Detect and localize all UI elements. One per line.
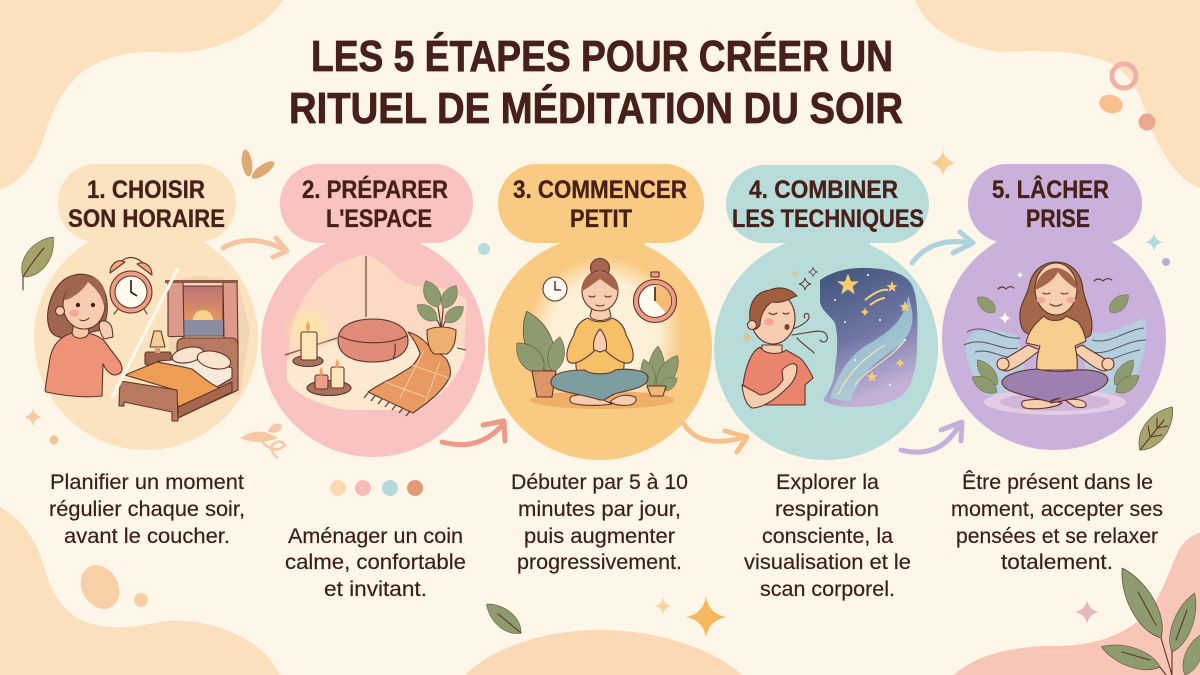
ground shadow [530,391,674,409]
step 1 heading: 1. CHOISIR [87,176,205,204]
icon: ground mat [984,389,1126,415]
step 2 badge shape [261,164,485,457]
step 4 description: respiration [775,498,879,521]
icon: birds and stars [998,272,1112,324]
icon: pot plant [413,277,468,354]
illustration: woman thinking [45,274,122,397]
step 3 description: progressivement. [517,551,682,574]
panel: step 2 [261,164,485,457]
icon: sparkles bottom center [654,597,726,637]
icon: wall clock [543,277,567,301]
step 3 description [511,471,688,574]
arrow: step 5 lead-in [901,422,962,452]
icon: alarm clock [110,258,152,314]
illustration: meditating woman [997,262,1114,409]
icon: left plant [509,306,568,397]
step 5 badge shape [942,164,1166,450]
title: RITUEL DE MÉDITATION DU SOIR [289,83,903,133]
icon: pink sparkle [1075,600,1099,624]
illustration: galaxy visualisation [820,268,917,407]
step 4 heading: 4. COMBINER [749,176,898,204]
step 1 heading [68,176,225,233]
blob: bottom right [954,533,1200,675]
step 2 description [285,525,466,601]
icon: floor cushion [338,319,408,362]
illustration: bottom right plant [1098,562,1200,675]
icon: right plant [637,346,685,396]
arrow: step 3 to 4 [684,424,747,452]
icon: sparkle and dot left [24,408,58,444]
step 2 description: calme, confortable [285,551,466,574]
step 5 heading: 5. LÂCHER [992,174,1109,204]
step 4 description: visualisation et le [744,551,911,574]
icon: teal sparkle and dot [1145,233,1170,266]
step 5 description: Être présent dans le [962,471,1153,494]
step 2 description: Aménager un coin [288,525,463,548]
icon: scarf with fringe [364,332,450,416]
step 2 heading: 2. PRÉPARER [302,175,448,204]
icon: sprig near step 1 [240,424,285,458]
icon: large leaf right [1131,400,1182,457]
icon: leaf left [14,230,62,290]
step 5 description: pensées et se relaxer [956,525,1158,548]
step 5 description [951,471,1163,574]
step 1 description: Planifier un moment [50,471,244,494]
step 1 description: avant le coucher. [64,525,230,548]
step 1 heading: SON HORAIRE [68,205,225,233]
step 3 description: Débuter par 5 à 10 [511,471,688,494]
icon: small leaves [969,290,1143,398]
step 3 heading: PETIT [570,205,632,233]
icon: orange sparkle [930,150,956,176]
illustration: waves [964,318,1146,395]
step 3 heading [513,176,687,233]
icon: breath lines [790,313,827,353]
step 3 heading: 3. COMMENCER [513,176,687,204]
arrow: step 4 to 5 [912,232,973,263]
icon: bottom center leaf [481,597,527,640]
blob: top left [0,0,283,190]
panel: step 1 [34,164,258,450]
arrow: step 1 to 2 [223,238,287,257]
step 5 heading [992,174,1109,233]
step 4 description [744,471,911,601]
icon: twin leaflets [240,149,277,182]
illustration: room wall and floor [285,255,467,410]
illustration: bedroom [119,276,250,421]
blob: bottom left [0,507,280,675]
decorative shapes: bottom left [73,558,148,616]
step 2 description: et invitant. [324,578,427,601]
blob: bottom center [465,630,742,675]
step 1 description: régulier chaque soir, [49,498,245,521]
step 4 description: scan corporel. [760,578,895,601]
step 4 description: consciente, la [762,525,893,548]
step 2 heading: L'ESPACE [326,205,432,233]
step 4 heading [732,176,924,233]
step 5 description: moment, accepter ses [951,498,1163,521]
step 3 description: puis augmenter [524,525,675,548]
step 2 dots [330,480,423,496]
title [289,31,903,133]
decorative dots and shapes: top right [1097,64,1156,130]
icon: candles [282,304,351,396]
panel: step 5 [942,164,1166,450]
step 5 heading: PRISE [1026,205,1090,233]
arrow: step 2 to 3 [442,421,505,445]
step 3 badge shape [488,164,712,460]
step 1 description [49,471,245,548]
panel: step 4 [714,165,938,460]
icon: stopwatch [634,272,676,322]
illustration: meditating person [551,258,648,405]
step 4 description: Explorer la [776,471,879,494]
title: LES 5 ÉTAPES POUR CRÉER UN [311,31,893,81]
step 4 heading: LES TECHNIQUES [732,205,924,233]
step 3 description: minutes par jour, [518,498,681,521]
step 2 heading [302,175,448,233]
blob: top right [915,0,1200,188]
step 5 description: totalement. [1001,551,1113,574]
icon: teal dot [478,243,490,255]
step 1 badge shape [34,164,258,450]
step 4 badge shape [714,165,938,460]
diagonal divider [112,268,178,398]
icon: sparkles near head [741,268,818,343]
illustration: man breathing [742,288,813,408]
light halo [526,257,682,413]
panel: step 3 [488,164,712,460]
